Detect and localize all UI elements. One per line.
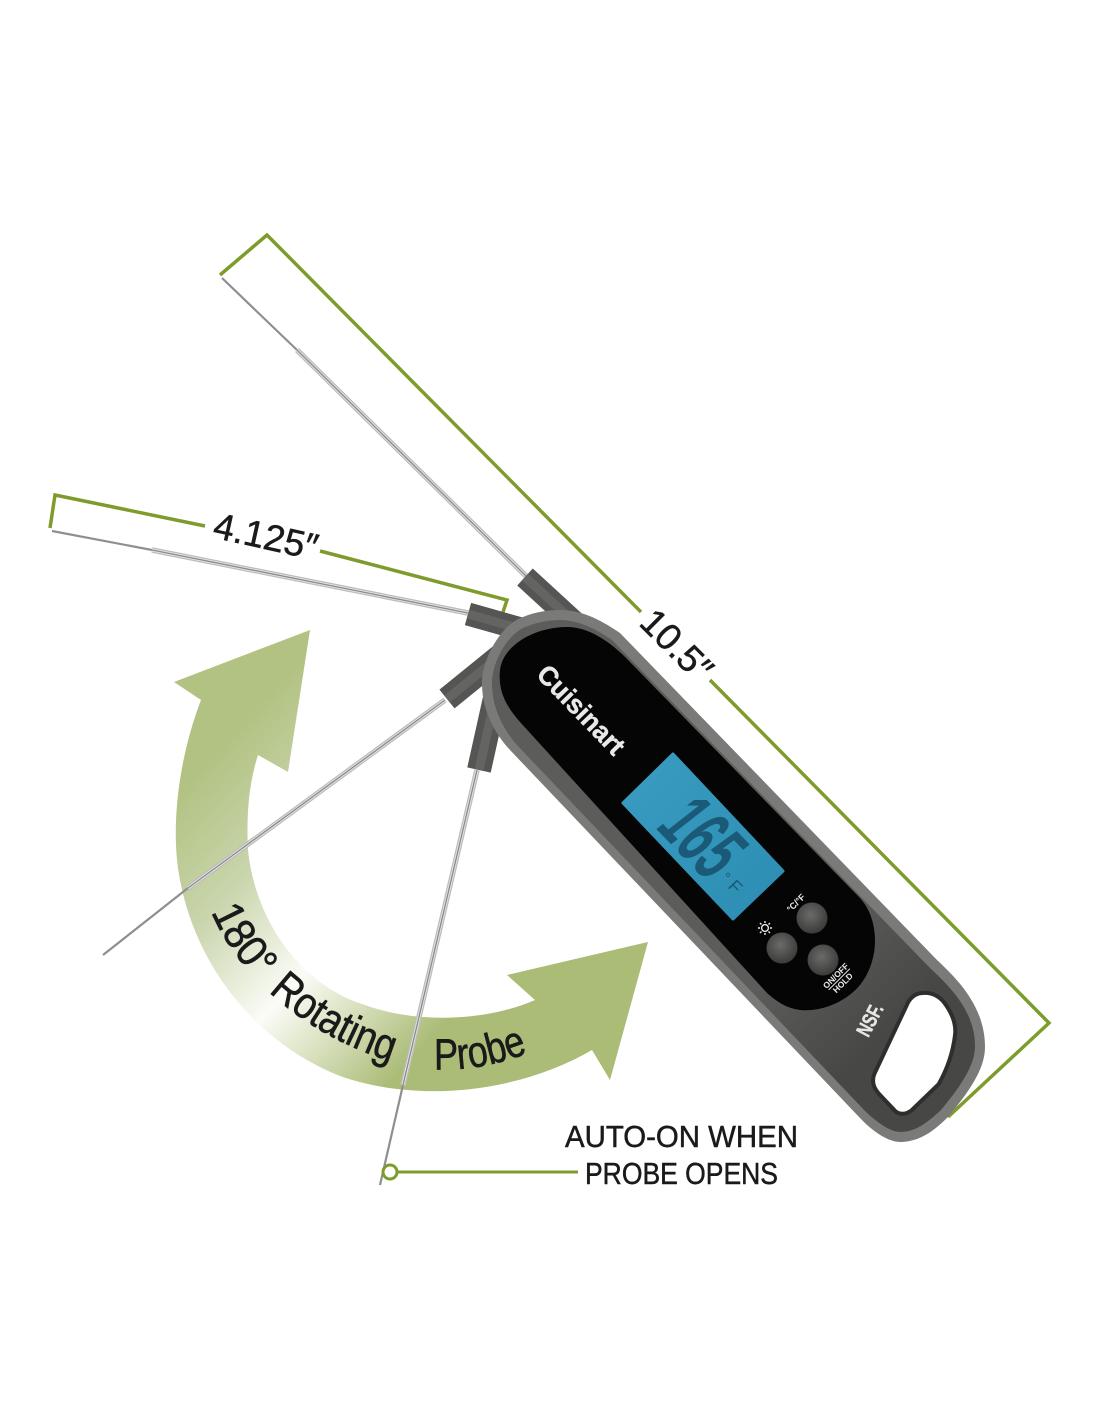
button label: unit toggle: °C/°F	[785, 891, 808, 914]
bottle opener hole	[875, 995, 953, 1112]
body shell	[482, 610, 985, 1142]
button label: on off hold	[821, 961, 858, 998]
arrow label: 180 Rotating Probe: Probe	[436, 1032, 525, 1070]
callout text: auto-on: PROBE OPENS	[585, 1156, 778, 1191]
temperature reading: 165	[640, 782, 765, 893]
icon: backlight sun	[758, 921, 772, 935]
probe position: lower	[380, 698, 495, 1185]
dimension line: 4.125 inch probe	[50, 495, 507, 612]
brand name: Cuisinart	[531, 659, 631, 761]
callout text: auto-on: AUTO-ON WHEN	[565, 1119, 798, 1154]
LCD display	[623, 754, 783, 919]
thermometer body	[482, 610, 985, 1142]
arrow label: 180 Rotating Probe	[212, 904, 525, 1070]
button label: on off hold: ON/OFF	[821, 961, 851, 991]
certification mark: NSF.	[852, 1000, 889, 1041]
arrow label: 180 Rotating Probe: 180°	[212, 904, 277, 965]
temperature unit: F: F	[724, 876, 746, 898]
dimension label: 10.5 inch: 10.5″	[632, 601, 721, 690]
dimension label: 4.125 inch: 4.125″	[210, 505, 322, 568]
probe position: upper	[222, 278, 574, 622]
dimension line: 10.5 inch length	[220, 235, 1049, 1117]
arrow label: 180 Rotating Probe: Rotating	[270, 970, 396, 1068]
callout text: auto-on	[565, 1119, 798, 1191]
probe position: left	[52, 531, 528, 631]
probe position: lower left	[103, 652, 505, 955]
temperature unit: degree: °	[725, 870, 731, 887]
button label: on off hold: HOLD	[831, 971, 855, 995]
curved arrow: 180 degree rotation	[174, 630, 648, 1092]
callout leader line	[383, 1165, 578, 1179]
black front panel	[500, 627, 875, 1010]
buttons	[766, 902, 838, 976]
